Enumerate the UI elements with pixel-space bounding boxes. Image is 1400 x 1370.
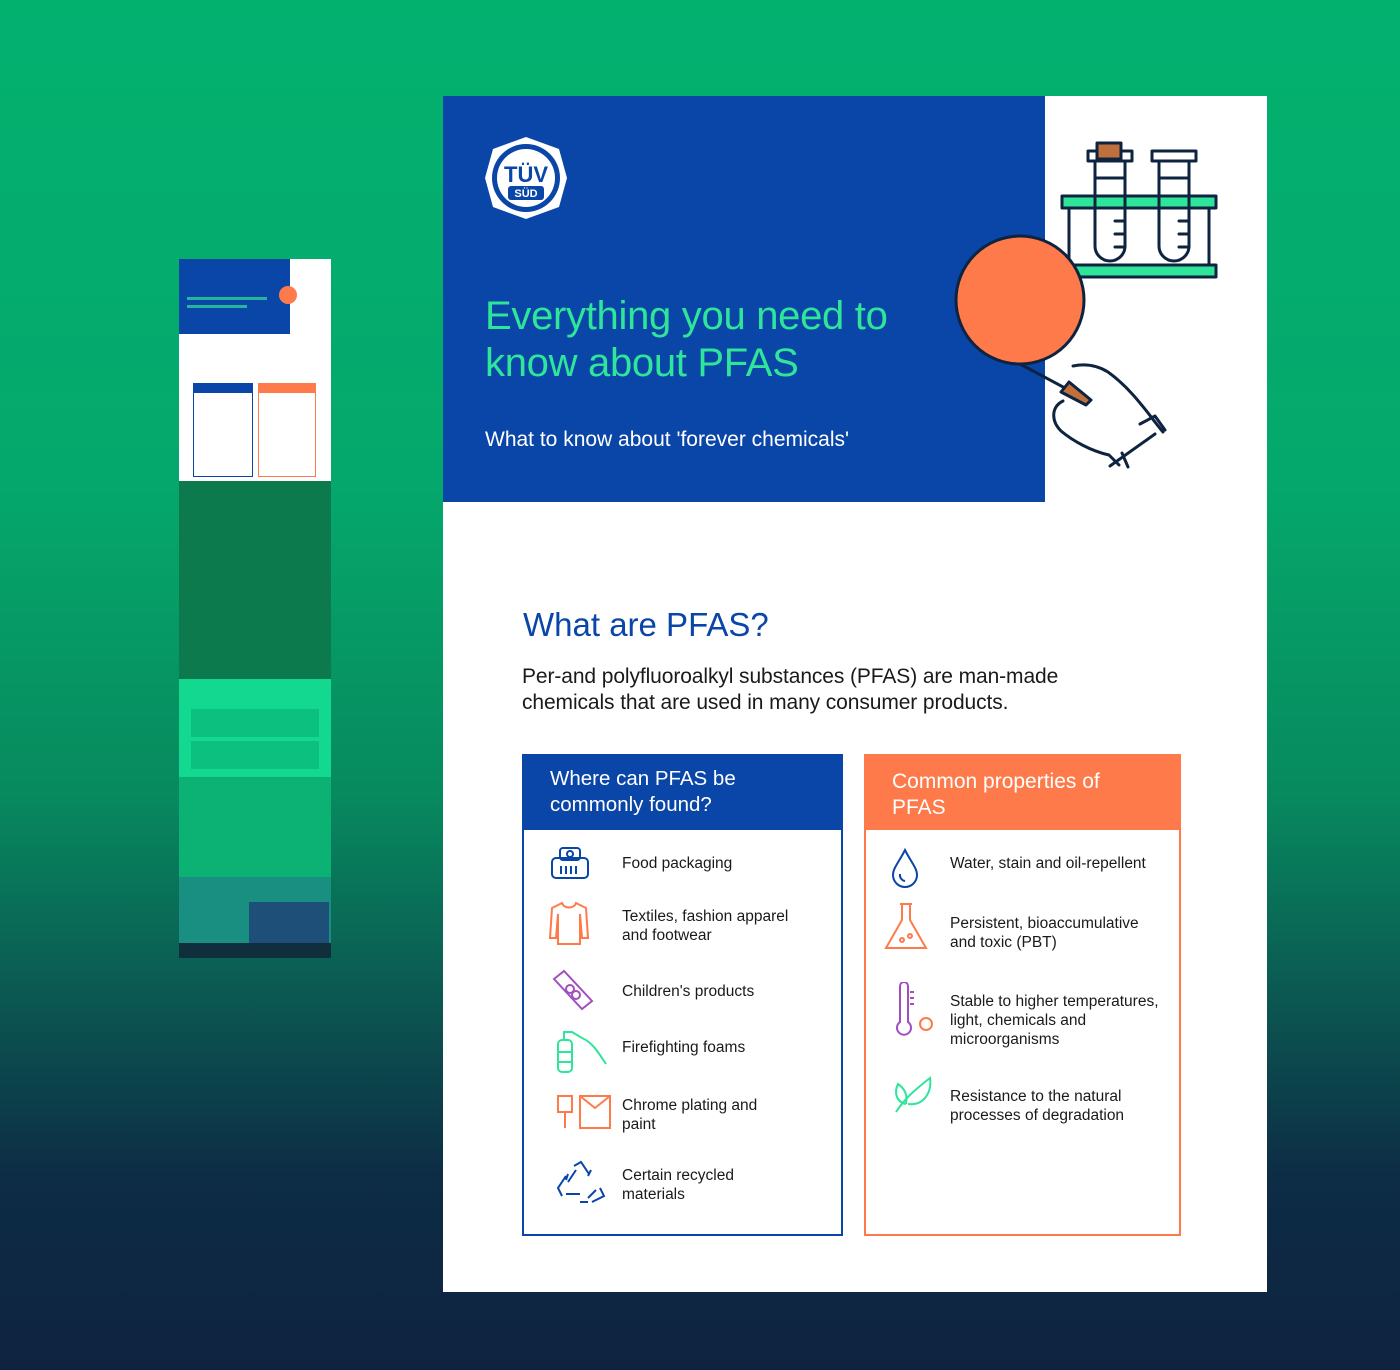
- item: PBT: Persistent, bioaccumulative: [950, 915, 1139, 932]
- item: recycled materials: [556, 1160, 734, 1203]
- item: resistance: Resistance to the natural: [950, 1088, 1121, 1105]
- illustration: magnifier and test tubes: [954, 142, 1218, 468]
- main page: [443, 96, 1267, 1292]
- item: stable: [896, 982, 1159, 1048]
- header band: [443, 96, 1045, 502]
- panel: common properties: [864, 754, 1181, 1236]
- thumbnail: full infographic preview: [179, 259, 331, 958]
- title: Everything you need to: [485, 294, 888, 338]
- item: recycled materials: Certain recycled: [622, 1167, 734, 1184]
- item: food packaging: [551, 847, 732, 879]
- item: water repellent: [892, 848, 1146, 888]
- subtitle: What to know about 'forever chemicals': [485, 428, 849, 451]
- item: chrome plating and paint: Chrome plating and: [622, 1097, 757, 1114]
- panel header: [524, 756, 841, 830]
- item: resistance: processes of degradation: [950, 1107, 1124, 1124]
- item: children's products: Children's products: [622, 983, 754, 1000]
- item: resistance: [895, 1076, 1124, 1124]
- item: firefighting foams: [557, 1031, 745, 1073]
- item: children's products: [552, 970, 754, 1010]
- panel header: [866, 756, 1179, 830]
- item: textiles: and footwear: [622, 927, 712, 944]
- item: food packaging: Food packaging: [622, 855, 732, 872]
- item: chrome plating and paint: [557, 1095, 757, 1133]
- item: PBT: and toxic (PBT): [950, 934, 1057, 951]
- item: textiles: Textiles, fashion apparel: [622, 908, 788, 925]
- panel header: PFAS: [892, 796, 946, 819]
- panel: common properties: microorganisms: [950, 1031, 1059, 1048]
- item: recycled materials: materials: [622, 1186, 685, 1203]
- logo TÜV SÜD: TÜV: [504, 162, 548, 187]
- intro text: [522, 665, 1058, 714]
- item: stable: light, chemicals and: [950, 1012, 1086, 1029]
- section heading: What are PFAS?: What are PFAS?: [523, 606, 769, 643]
- item: textiles: [548, 902, 788, 945]
- panel: where found: [522, 754, 843, 1236]
- panel header: commonly found?: [550, 793, 712, 816]
- logo TÜV SÜD: SÜD: [514, 187, 538, 200]
- panel header: Common properties of: [892, 770, 1100, 793]
- item: PBT: [884, 903, 1139, 951]
- title: know about PFAS: [485, 341, 798, 385]
- item: chrome plating and paint: paint: [622, 1116, 656, 1133]
- item: stable: Stable to higher temperatures,: [950, 993, 1159, 1010]
- intro text: Per-and polyfluoroalkyl substances (PFAS) are man-made: [522, 665, 1058, 688]
- logo TÜV SÜD: [485, 137, 567, 219]
- item: water repellent: Water, stain and oil-repellent: [950, 855, 1146, 872]
- panel header: Where can PFAS be: [550, 767, 736, 790]
- item: firefighting foams: Firefighting foams: [622, 1039, 745, 1056]
- title: [485, 294, 888, 385]
- intro text: chemicals that are used in many consumer products.: [522, 691, 1008, 714]
